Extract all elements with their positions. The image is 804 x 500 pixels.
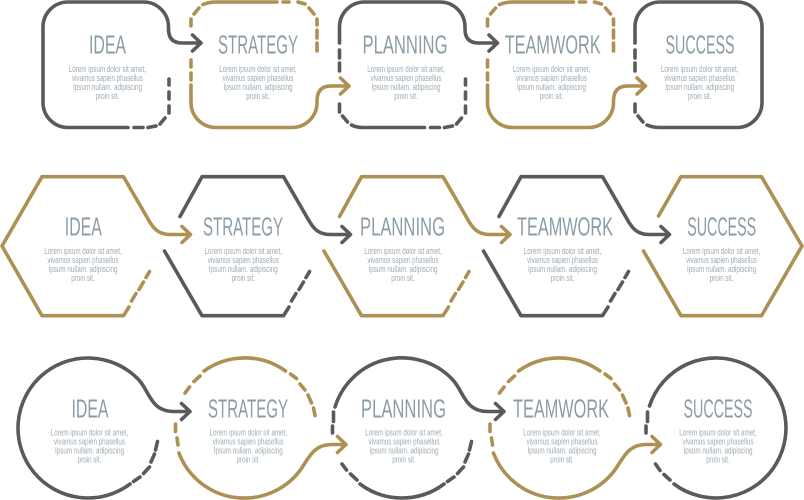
shape: planning rounded square	[340, 2, 498, 127]
shape: idea rounded square	[43, 2, 201, 127]
text: success: vivamus sapien phasellus	[686, 255, 757, 265]
shape: planning circle	[332, 358, 504, 498]
text: idea	[69, 30, 146, 101]
text: success: Ipsum nullam. adipiscing	[687, 264, 756, 274]
text: strategy: STRATEGY	[218, 30, 298, 60]
text: planning: proin sit.	[394, 91, 418, 101]
shape: strategy circle	[176, 358, 346, 498]
text: idea: Lorem ipsum dolor sit amet,	[51, 428, 128, 438]
text: strategy: Ipsum nullam. adipiscing	[209, 264, 278, 274]
text: planning: PLANNING	[362, 30, 448, 60]
text: planning: Lorem ipsum dolor sit amet,	[365, 428, 443, 438]
text: planning: PLANNING	[360, 212, 445, 242]
text: success: proin sit.	[688, 91, 711, 101]
text: strategy	[218, 30, 298, 101]
text: planning: vivamus sapien phasellus	[370, 73, 442, 83]
text: planning: proin sit.	[391, 273, 415, 283]
text: planning: vivamus sapien phasellus	[368, 436, 440, 446]
text: planning: vivamus sapien phasellus	[368, 255, 439, 265]
text: success: SUCCESS	[666, 30, 734, 60]
text: strategy: Ipsum nullam. adipiscing	[224, 82, 293, 92]
text: teamwork: Lorem ipsum dolor sit amet,	[513, 64, 590, 74]
text: success: Lorem ipsum dolor sit amet,	[683, 246, 760, 256]
text: success: proin sit.	[706, 454, 730, 464]
shape: strategy rounded square	[191, 2, 349, 128]
shape: idea circle	[18, 358, 190, 498]
text: success: Lorem ipsum dolor sit amet,	[661, 64, 738, 74]
text: success: proin sit.	[710, 273, 733, 283]
text: teamwork: Lorem ipsum dolor sit amet,	[524, 246, 601, 256]
text: idea	[51, 394, 128, 464]
text: strategy: Ipsum nullam. adipiscing	[214, 446, 283, 456]
text: success	[679, 394, 757, 464]
text: strategy: vivamus sapien phasellus	[208, 255, 279, 265]
text: planning: PLANNING	[361, 394, 446, 424]
text: strategy: vivamus sapien phasellus	[222, 73, 294, 83]
text: strategy	[203, 212, 283, 283]
text: teamwork	[505, 30, 601, 101]
shape: strategy hexagon	[164, 177, 350, 316]
text: strategy: Lorem ipsum dolor sit amet,	[210, 428, 287, 438]
text: teamwork: vivamus sapien phasellus	[527, 255, 598, 265]
text: planning: proin sit.	[392, 454, 416, 464]
shape: teamwork rounded square	[488, 2, 646, 128]
text: success	[661, 30, 738, 101]
text: success: vivamus sapien phasellus	[664, 73, 736, 83]
shape: teamwork hexagon	[484, 177, 670, 316]
text: success: Ipsum nullam. adipiscing	[684, 446, 753, 456]
row: rounded squares	[43, 2, 762, 127]
text: teamwork: proin sit.	[551, 273, 574, 283]
text: planning: Ipsum nullam. adipiscing	[372, 82, 441, 92]
text: strategy: STRATEGY	[208, 394, 288, 424]
text: teamwork: TEAMWORK	[505, 30, 601, 60]
row: hexagons	[2, 177, 802, 316]
text: idea: Ipsum nullam. adipiscing	[73, 82, 142, 92]
shape: success rounded square	[635, 2, 762, 128]
text: idea: Lorem ipsum dolor sit amet,	[69, 64, 146, 74]
text: teamwork: proin sit.	[540, 91, 563, 101]
text: planning: Ipsum nullam. adipiscing	[370, 446, 439, 456]
text: teamwork: Ipsum nullam. adipiscing	[528, 264, 597, 274]
text: strategy	[208, 394, 288, 464]
shape: idea hexagon	[2, 177, 190, 316]
text: strategy: Lorem ipsum dolor sit amet,	[205, 246, 282, 256]
text: planning	[362, 30, 448, 101]
text: planning	[361, 394, 446, 464]
text: strategy: vivamus sapien phasellus	[213, 436, 284, 446]
text: idea: vivamus sapien phasellus	[54, 436, 125, 446]
text: strategy: Lorem ipsum dolor sit amet,	[219, 64, 297, 74]
row: circles	[18, 358, 786, 498]
text: idea: proin sit.	[78, 454, 101, 464]
text: strategy: STRATEGY	[203, 212, 283, 242]
text: strategy: proin sit.	[237, 454, 260, 464]
text: idea: Ipsum nullam. adipiscing	[48, 264, 118, 274]
text: success: Ipsum nullam. adipiscing	[665, 82, 734, 92]
text: planning: Ipsum nullam. adipiscing	[368, 264, 438, 274]
text: idea	[44, 212, 122, 283]
text: planning	[360, 212, 445, 283]
text: idea: proin sit.	[96, 91, 119, 101]
text: success: vivamus sapien phasellus	[682, 436, 754, 446]
text: idea: IDEA	[72, 394, 109, 424]
text: strategy: proin sit.	[246, 91, 270, 101]
text: teamwork	[517, 212, 613, 283]
shape: planning hexagon	[324, 177, 510, 316]
text: idea: vivamus sapien phasellus	[72, 73, 143, 83]
text: success	[683, 212, 760, 283]
text: idea: Lorem ipsum dolor sit amet,	[44, 246, 122, 256]
text: teamwork	[513, 394, 609, 464]
text: teamwork: TEAMWORK	[513, 394, 609, 424]
text: teamwork: TEAMWORK	[517, 212, 613, 242]
text: teamwork: vivamus sapien phasellus	[526, 436, 598, 446]
shape: success hexagon	[644, 177, 802, 316]
text: planning: Lorem ipsum dolor sit amet,	[367, 64, 445, 74]
text: planning: Lorem ipsum dolor sit amet,	[364, 246, 442, 256]
text: idea: proin sit.	[71, 273, 95, 283]
text: idea: vivamus sapien phasellus	[48, 255, 119, 265]
text: idea: IDEA	[89, 30, 126, 60]
text: teamwork: vivamus sapien phasellus	[516, 73, 587, 83]
text: success: Lorem ipsum dolor sit amet,	[679, 428, 757, 438]
text: teamwork: proin sit.	[550, 454, 574, 464]
text: idea: Ipsum nullam. adipiscing	[55, 446, 124, 456]
shape: teamwork circle	[490, 358, 660, 498]
text: strategy: proin sit.	[232, 273, 255, 283]
shape: success circle	[646, 358, 786, 498]
text: teamwork: Lorem ipsum dolor sit amet,	[523, 428, 601, 438]
text: teamwork: Ipsum nullam. adipiscing	[517, 82, 586, 92]
text: teamwork: Ipsum nullam. adipiscing	[528, 446, 597, 456]
text: idea: IDEA	[65, 212, 102, 242]
